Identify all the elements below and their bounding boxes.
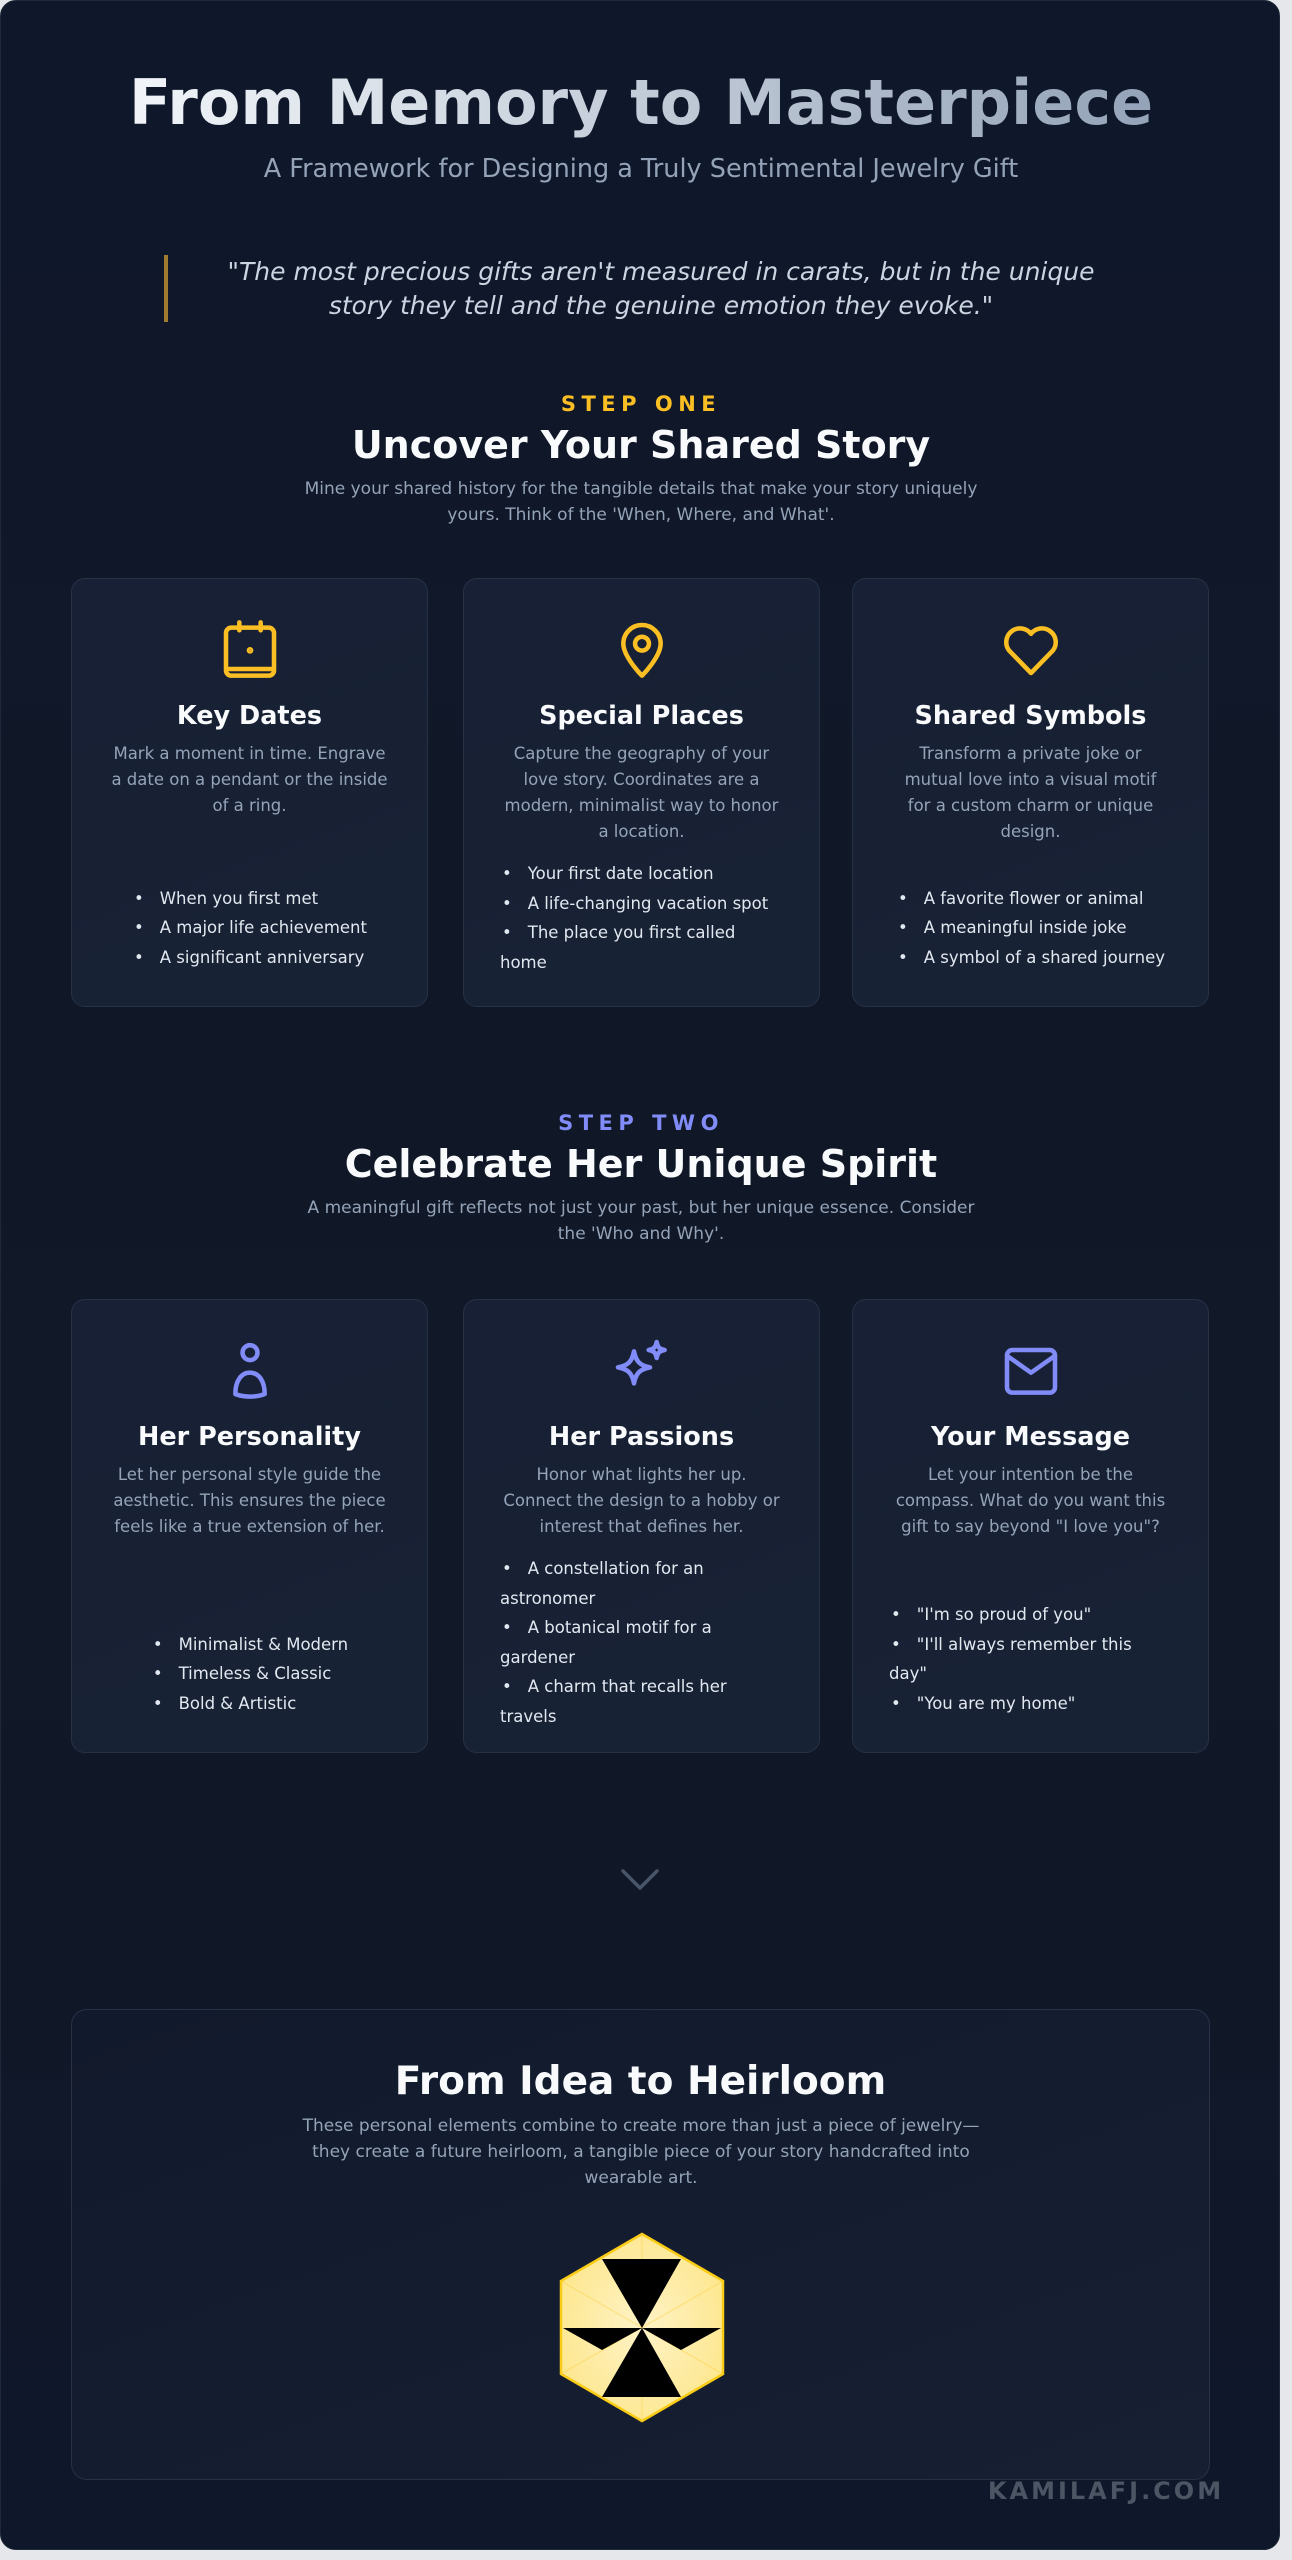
card: your message: "You are my home" [917,1694,1075,1712]
card: key dates: A significant anniversary [160,948,364,966]
watermark: KAMILAFJ.COM [988,2477,1224,2505]
card: her personality [71,1299,428,1753]
card: special places: A life-changing vacation spot [528,894,768,912]
icon: heart [1004,626,1058,676]
title: From Memory to Masterpiece [129,66,1153,139]
card: her personality: Minimalist & Modern [179,1634,348,1654]
card: key dates [71,578,428,1007]
card: your message: "I'm so proud of you" [917,1605,1091,1624]
card: special places [463,578,820,1007]
card: key dates: Key Dates [177,701,322,731]
card: her passions: A charm that recalls her travels [500,1677,727,1726]
step one description: Mine your shared history for the tangible details that make your story uniquely yours. Think of the 'When, Where, and What'. [305,479,977,525]
panel description: These personal elements combine to create more than just a piece of jewelry—they create a future heirloom, a tangible piece of your story handcrafted into wearable art. [303,2116,979,2188]
card: special places: Capture the geography of your love story. Coordinates are a modern, minimalist way to honor a location. [505,744,778,841]
card: special places: Your first date location [528,864,714,883]
card: her passions: A constellation for an astronomer [500,1559,704,1608]
card: shared symbols: A favorite flower or animal [924,888,1143,908]
card: your message: "I'll always remember this day" [889,1634,1132,1683]
card: your message [852,1299,1209,1753]
card: key dates: A major life achievement [160,918,367,937]
card: your message: Your Message [931,1422,1130,1452]
step two description: A meaningful gift reflects not just your past, but her unique essence. Consider the 'Who and Why'. [308,1198,974,1244]
card: key dates: When you first met [160,888,318,908]
card: her passions: A botanical motif for a gardener [500,1618,712,1666]
panel: from idea to heirloom [71,2009,1210,2480]
icon: calendar [224,620,276,678]
card: her personality: Her Personality [138,1422,361,1452]
step one label: STEP ONE [561,392,721,416]
card: her personality: Let her personal style guide the aesthetic. This ensures the piece feels like a true extension of her. [113,1465,386,1536]
quote accent bar [164,255,168,322]
card: her personality: Timeless & Classic [179,1664,331,1683]
card: shared symbols: A meaningful inside joke [924,918,1127,937]
subtitle: A Framework for Designing a Truly Sentimental Jewelry Gift [264,154,1018,184]
icon: gem [560,2232,724,2422]
card: special places: Special Places [539,701,744,731]
step two label: STEP TWO [558,1111,724,1135]
card: key dates: Mark a moment in time. Engrave a date on a pendant or the inside of a ring. [111,744,388,815]
icon: mail [1004,1348,1058,1395]
card: her passions: Honor what lights her up. Connect the design to a hobby or interest that defines her. [503,1465,780,1536]
quote: "The most precious gifts aren't measured in carats, but in the unique story they tell and the genuine emotion they evoke." [228,257,1094,320]
card: shared symbols [852,578,1209,1007]
card: her passions [463,1299,820,1753]
card: her passions: Her Passions [549,1422,734,1452]
card: your message: Let your intention be the compass. What do you want this gift to say beyond "I love you"? [896,1465,1165,1536]
icon: sparkles [616,1340,667,1386]
step one heading: Uncover Your Shared Story [352,423,930,467]
panel heading: From Idea to Heirloom [395,2059,886,2104]
card: special places: The place you first called home [500,923,735,972]
icon: map pin [621,622,663,678]
card: shared symbols: A symbol of a shared journey [924,948,1165,966]
arrow: chevron down [621,1869,659,1890]
card: her personality: Bold & Artistic [179,1694,296,1712]
step two heading: Celebrate Her Unique Spirit [345,1142,937,1186]
card: shared symbols: Shared Symbols [914,701,1146,731]
card: shared symbols: Transform a private joke or mutual love into a visual motif for a custom charm or unique design. [905,744,1156,841]
icon: user [233,1342,267,1399]
